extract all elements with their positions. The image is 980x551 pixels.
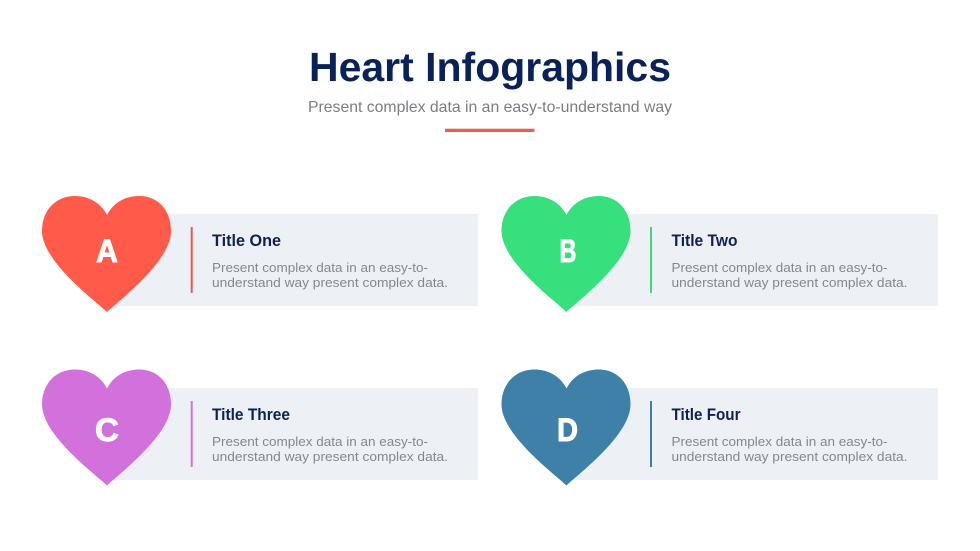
accent line [191,227,193,293]
body text [672,434,908,464]
title underline [445,129,534,132]
letter C: C [95,412,119,448]
heading: Title Four [672,405,741,424]
body text [212,434,448,464]
letter A: A [96,233,118,269]
body text: Present complex data in an easy-to- [672,434,888,449]
icon: heart A [42,196,171,312]
body text: understand way present complex data. [212,449,448,464]
body text: Present complex data in an easy-to- [212,260,428,275]
body text: understand way present complex data. [212,275,448,290]
panel: D [502,370,938,486]
panel background [107,214,478,306]
accent line [191,401,193,467]
body text [212,260,448,290]
body text [672,260,908,290]
panel: B [502,196,938,312]
panel background [566,388,938,480]
body text: Present complex data in an easy-to- [212,434,428,449]
accent line [650,401,652,467]
heading: Title One [212,231,281,250]
accent line [650,227,652,293]
heading: Title Two [672,231,738,250]
letter B: B [560,233,576,269]
icon: heart D [502,370,630,486]
panel background [107,388,478,480]
icon: heart C [42,370,171,486]
body text: understand way present complex data. [672,275,908,290]
panel background [566,214,938,306]
heading: Title Three [212,405,290,424]
icon: heart B [502,196,630,312]
subtitle: Present complex data in an easy-to-understand way [308,99,672,116]
letter D: D [557,412,578,448]
body text: understand way present complex data. [672,449,908,464]
panel: A [42,196,478,312]
title: Heart Infographics [309,44,671,90]
body text: Present complex data in an easy-to- [672,260,888,275]
panel: C [42,370,478,486]
